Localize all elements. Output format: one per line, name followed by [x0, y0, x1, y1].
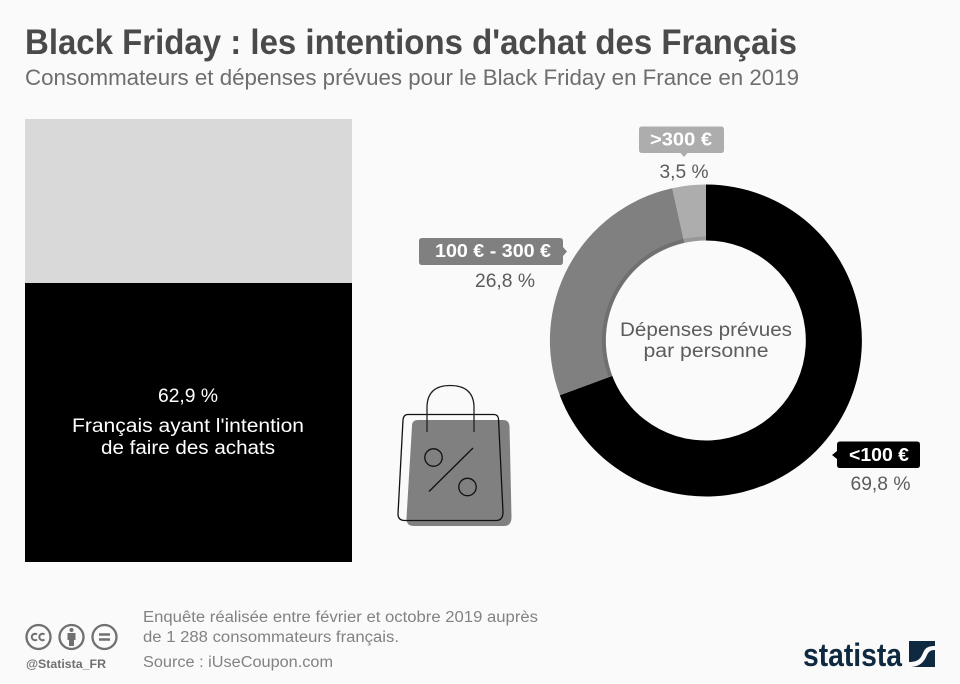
bar label — [72, 386, 304, 459]
icon: creative commons licence — [26, 625, 116, 649]
source note: Enquête réalisée entre février et octobre 2019 auprès — [143, 609, 538, 626]
bar segment: remaining share — [25, 119, 352, 283]
handle: @Statista_FR: @Statista_FR — [26, 657, 106, 671]
icon: cc — [26, 625, 50, 649]
donut chart — [550, 184, 862, 496]
segment: 100 € - 300 € — [550, 188, 684, 395]
segment: <100 € — [560, 184, 862, 496]
callout: 100 € - 300 €: 100 € - 300 € — [435, 240, 551, 261]
source note: de 1 288 consommateurs français. — [143, 629, 399, 646]
callout: >300 € — [639, 126, 724, 183]
bar segment: 62,9 % — [25, 283, 352, 562]
icon: attribution — [60, 625, 84, 649]
segment: >300 € — [672, 184, 706, 243]
callout: 100 € - 300 € — [419, 238, 567, 292]
panel: stacked bar — [25, 119, 352, 562]
source note — [143, 609, 538, 671]
title: Black Friday : les intentions d'achat des Français — [25, 23, 797, 62]
bar label: 62,9 % — [158, 386, 218, 407]
callout: <100 €: <100 € — [849, 444, 909, 465]
subtitle: Consommateurs et dépenses prévues pour le Black Friday en France en 2019 — [25, 65, 799, 90]
bar label: Français ayant l'intention — [72, 416, 304, 437]
donut centre label: par personne — [644, 341, 768, 362]
donut centre label: Dépenses prévues — [620, 320, 792, 341]
callout: <100 € — [832, 442, 920, 495]
bar label: de faire des achats — [101, 438, 275, 459]
icon: no derivatives — [92, 625, 116, 649]
icon: shopping bag — [398, 386, 512, 526]
source note: Source : iUseCoupon.com — [143, 654, 333, 671]
logo: statista: statista — [803, 637, 902, 673]
logo mark — [909, 641, 935, 667]
inner shadow band — [602, 236, 706, 377]
donut centre label — [620, 320, 792, 362]
callout: 100 € - 300 €: 26,8 % — [475, 271, 535, 292]
callout: <100 €: 69,8 % — [850, 474, 911, 495]
callout: >300 €: 3,5 % — [660, 162, 709, 183]
callout: >300 €: >300 € — [650, 128, 712, 150]
